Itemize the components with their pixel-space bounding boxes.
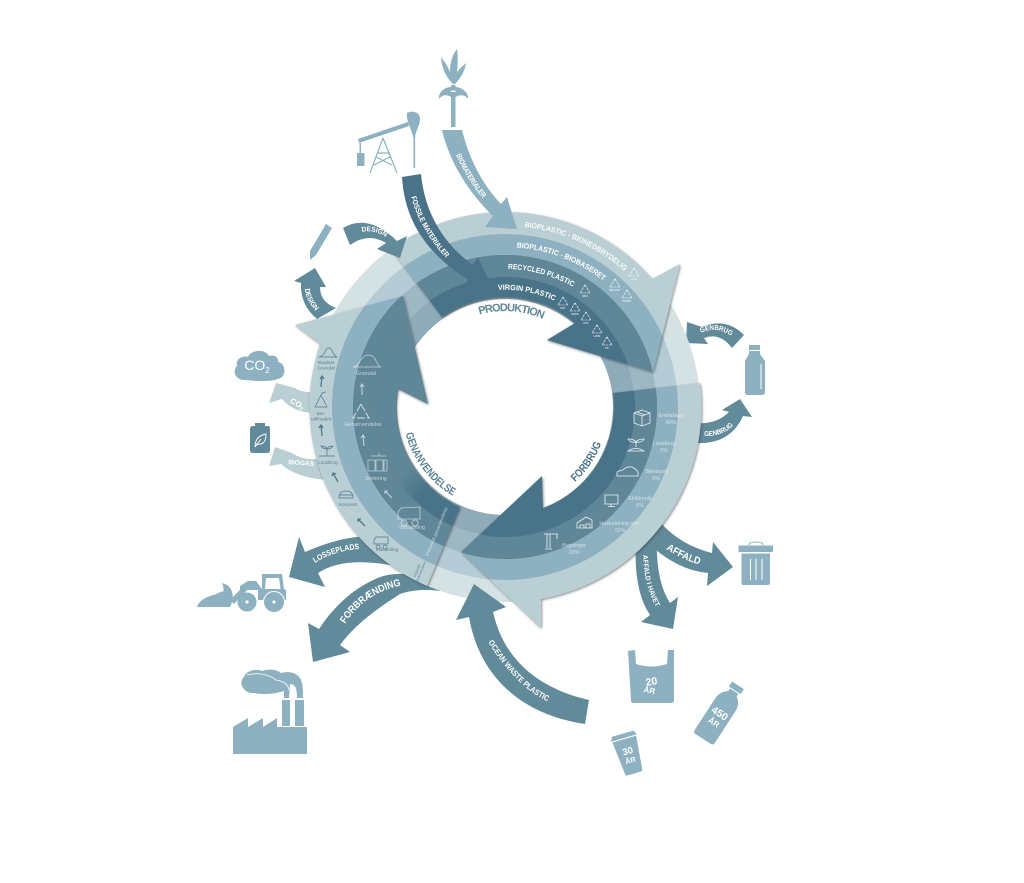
icons: resin codes: rPET [582, 294, 588, 298]
label: landbrug: Landbrug [318, 460, 338, 465]
arrow: up [319, 425, 323, 436]
label: elektronik: 6% [636, 503, 644, 509]
arrow: design top [343, 222, 407, 258]
label: emballage: Emballage [658, 413, 684, 419]
icons: resin codes: BIO-PET [610, 288, 621, 292]
arrow: CO2: CO [289, 396, 303, 410]
label: affald: AFFALD [666, 544, 700, 564]
arrow: diagonal [385, 491, 392, 498]
icons: resin codes: PLA [632, 277, 637, 281]
icon: house [577, 517, 592, 528]
label: indsamling: Indsamling [376, 547, 399, 552]
arrow: up [360, 384, 364, 395]
icon: CO2 cloud [235, 351, 284, 381]
forbrug sector items [544, 410, 684, 556]
production arrow [394, 212, 682, 374]
label: mekanisk genanvendelse: Mekanisk genanvendelse [425, 506, 449, 556]
forbrug arrow [460, 382, 704, 630]
icons: resin codes: PVC [583, 321, 589, 325]
icon: sugar cane [439, 49, 468, 127]
icon: coffee cup 30 years: ÅR [624, 754, 637, 766]
mechanical recycling steps [344, 355, 449, 556]
icon: bottle 450 years [693, 679, 748, 746]
heading: forbrug: FORBRUG [570, 442, 600, 482]
icons: resin codes: HDPE [571, 312, 579, 316]
icon: plastic bag: ÅR [643, 685, 656, 696]
icon: oil pump [357, 112, 420, 173]
label: affald i havet: AFFALD I HAVET [643, 555, 660, 606]
icon: car [617, 467, 638, 476]
label: indsamling: Indsamling [399, 525, 425, 531]
icon: plastic bag: 20 [645, 675, 658, 689]
arrow: biomaterialer: BIOMATERIALER [456, 153, 486, 198]
icon: box [634, 410, 650, 426]
arrow: design left: DESIGN [305, 288, 319, 310]
arrow: biomaterialer [442, 130, 517, 229]
label: genbrug bottom: GENBRUG [704, 423, 732, 436]
arrow: genbrug bottom [695, 399, 752, 443]
icon: biogas canister [250, 423, 270, 453]
label: bilindustri: 9% [652, 476, 660, 482]
icon: truck [398, 507, 420, 526]
label: organisk genanvendelse: genanvendelse [415, 561, 427, 584]
genanvendelse arrow [295, 296, 462, 588]
arrow: up [361, 435, 365, 446]
icon: trash can [738, 542, 773, 585]
heading: genanvendelse: GENANVENDELSE [406, 432, 456, 496]
label: emballage: 40% [666, 420, 677, 426]
production band labels [498, 222, 627, 300]
icon: wheel loader [197, 574, 286, 612]
arrow: biogas: BIOGAS [288, 459, 315, 468]
icon: plant [628, 439, 644, 451]
label: bioraffinaderi: raffinaderi [311, 416, 331, 421]
arrow: ocean waste plastic: OCEAN WASTE PLASTIC [489, 640, 550, 701]
label: bioplast granulat: Bioplast [318, 360, 334, 365]
icon: monitor [605, 495, 618, 506]
label: bygninger: 20% [569, 550, 580, 556]
icons: resin codes: PET [560, 306, 566, 310]
icon: bottle [745, 345, 765, 395]
label: losseplads: LOSSEPLADS [312, 544, 359, 563]
icon: compost [339, 491, 353, 498]
arrow: CO2 [269, 383, 315, 413]
label: landbrug: 3% [660, 448, 668, 454]
ring: pale transition base [321, 223, 689, 591]
icon: coffee cup 30 years: 30 [621, 745, 635, 758]
icon: crane [544, 534, 558, 549]
label: bioplast granulat: Granulat [317, 365, 336, 370]
icon: plastic bag [628, 650, 674, 703]
arrow: fossile materialer: FOSSILE MATERIALER [411, 196, 449, 258]
arrow: design left [294, 268, 336, 319]
icons: resin codes [558, 268, 639, 350]
label: bilindustri: Bilindustri [646, 469, 668, 475]
icon: bioplast pile [319, 348, 337, 357]
label: landbrug: Landbrug [653, 441, 675, 447]
icons: resin codes: LDPE [594, 334, 601, 338]
arrow: affald [645, 522, 733, 586]
arrow: fossile materialer [402, 174, 488, 283]
icon: CO2 cloud: 2 [265, 366, 270, 375]
icon: biorefinery [315, 392, 327, 407]
arrow: biogas [269, 447, 325, 480]
icon: coffee cup 30 years [610, 730, 647, 777]
icons: resin codes: BIOPE [623, 299, 631, 303]
icon: plant [319, 446, 335, 456]
production band labels: RECYCLED PLASTIC [508, 264, 574, 286]
arrow: diagonal [332, 473, 338, 482]
arrow: up [320, 376, 324, 387]
arrow: forbraending [308, 574, 440, 662]
heading: produktion: PRODUKTION [478, 304, 545, 319]
icon: pencil [310, 224, 332, 260]
icon: CO2 cloud: CO [244, 357, 265, 373]
arrow: design top: DESIGN [362, 226, 388, 237]
label: forbraending: FORBRÆNDING [340, 579, 400, 624]
icon: bottle 450 years: 450 [709, 704, 730, 724]
label: genbrug top: GENBRUG [700, 325, 733, 335]
label: kompost: Kompost [339, 502, 358, 507]
label: husholdning: Husholdning mm. [599, 521, 641, 527]
label: elektronik: Elektronik [628, 496, 652, 502]
organic recycling steps [311, 348, 427, 584]
arrow: affald i havet [636, 535, 678, 629]
label: granulat: Granulat [356, 371, 377, 377]
label: sortering: Sortering [365, 476, 387, 482]
icon: granulate pile [353, 355, 381, 367]
icon: bottle 450 years: ÅR [706, 716, 721, 730]
label: husholdning: 22% [615, 528, 626, 534]
arrow: diagonal [358, 519, 365, 526]
arrow: losseplads [289, 536, 400, 587]
label: bygninger: Bygninger [562, 543, 586, 549]
production band labels: BIOPLASTIC - BIOBASERET [517, 242, 606, 280]
arrow: genbrug top [686, 322, 744, 348]
production band labels: VIRGIN PLASTIC [498, 284, 556, 300]
label: genanvendelse: Genanvendelse [344, 422, 382, 428]
icon: factory [233, 670, 307, 754]
arrow: ocean waste plastic [456, 584, 589, 724]
production band labels: BIOPLASTIC - BIONEDBRYDELIG [525, 222, 627, 270]
label: organisk genanvendelse: Organisk [413, 564, 421, 578]
icon: sorting [368, 453, 387, 471]
icons: resin codes: PP [605, 346, 609, 350]
icon: recycle [353, 404, 369, 418]
arrow: CO2: 2 [298, 406, 304, 413]
label: bioraffinaderi: Bio- [317, 411, 325, 416]
icon: truck [374, 537, 388, 549]
